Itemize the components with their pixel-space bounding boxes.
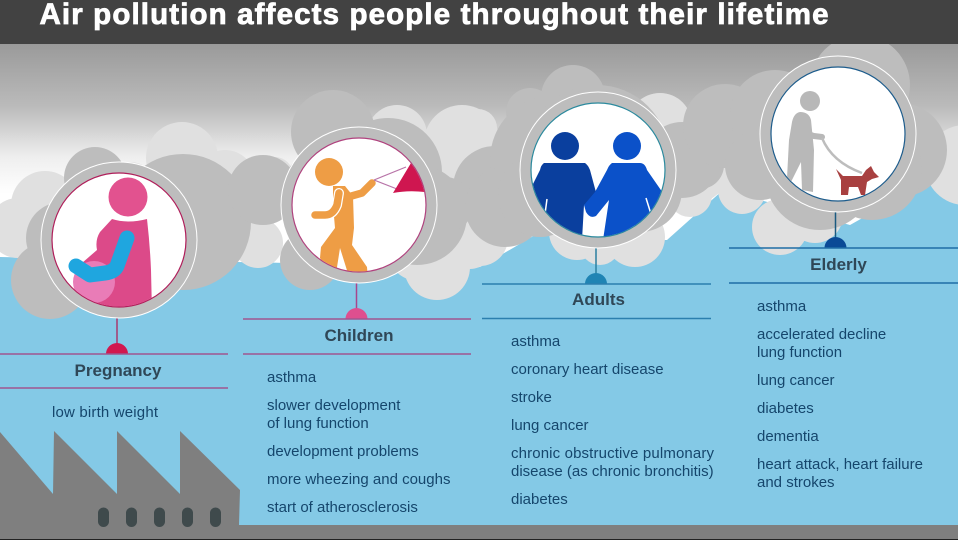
children badge xyxy=(281,127,437,283)
children effects: start of atherosclerosis xyxy=(267,499,418,516)
adults effects: chronic obstructive pulmonary xyxy=(511,445,714,462)
panel: adults xyxy=(482,92,714,508)
elderly effects: lung function xyxy=(757,344,842,361)
elderly effects: dementia xyxy=(757,428,819,445)
adults connector xyxy=(482,248,711,318)
children effects: more wheezing and coughs xyxy=(267,471,450,488)
elderly connector xyxy=(729,212,958,283)
pregnancy badge xyxy=(41,162,197,318)
icon: elderly person walking dog xyxy=(787,91,879,195)
sky background xyxy=(0,44,958,194)
light clouds xyxy=(0,93,958,300)
elderly effects xyxy=(757,298,923,491)
children effects: asthma xyxy=(267,369,317,386)
adults effects: disease (as chronic bronchitis) xyxy=(511,463,714,480)
panel: pregnancy xyxy=(0,162,228,421)
children connector xyxy=(243,283,471,354)
children heading: Children xyxy=(325,326,393,345)
children effects: development problems xyxy=(267,443,419,460)
panel: children xyxy=(243,127,471,516)
pregnancy connector xyxy=(0,318,228,388)
elderly effects: asthma xyxy=(757,298,807,315)
elderly effects: lung cancer xyxy=(757,372,835,389)
elderly badge xyxy=(760,56,916,212)
children effects: of lung function xyxy=(267,415,369,432)
elderly effects: heart attack, heart failure xyxy=(757,456,923,473)
elderly effects: diabetes xyxy=(757,400,814,417)
adults effects: diabetes xyxy=(511,491,568,508)
adults effects: lung cancer xyxy=(511,417,589,434)
adults effects: coronary heart disease xyxy=(511,361,664,378)
factory windows xyxy=(98,508,221,527)
blue background xyxy=(0,170,958,540)
icon: pregnant woman xyxy=(73,178,152,312)
adults effects xyxy=(511,333,714,508)
elderly effects: and strokes xyxy=(757,474,835,491)
children effects xyxy=(267,369,450,516)
pregnancy effects: low birth weight xyxy=(52,404,159,421)
dark clouds xyxy=(11,35,947,319)
elderly heading: Elderly xyxy=(810,255,867,274)
panel: elderly xyxy=(729,56,958,491)
title bar xyxy=(0,0,958,44)
pregnancy heading: Pregnancy xyxy=(75,361,162,380)
icon: child with kite xyxy=(315,158,425,280)
adults effects: asthma xyxy=(511,333,561,350)
icon: two adults xyxy=(530,132,665,240)
adults badge xyxy=(520,92,676,248)
adults effects: stroke xyxy=(511,389,552,406)
adults heading: Adults xyxy=(572,290,625,309)
elderly effects: accelerated decline xyxy=(757,326,886,343)
factory silhouette xyxy=(0,431,958,540)
children effects: slower development xyxy=(267,397,401,414)
